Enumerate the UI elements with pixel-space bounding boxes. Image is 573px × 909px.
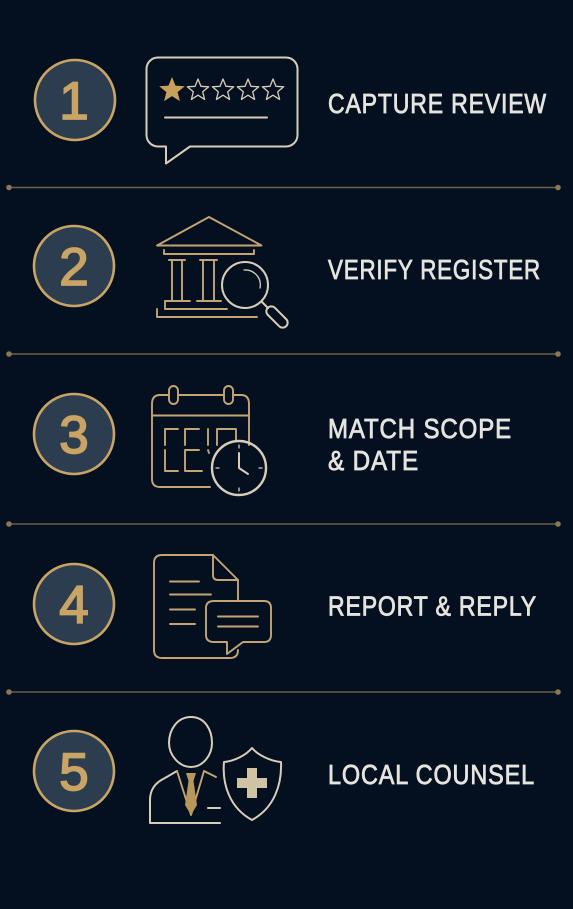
step 3 label: & DATE: [328, 445, 419, 476]
step 5 number badge: 5: [59, 743, 89, 802]
step 1 number badge: [35, 60, 115, 140]
icon: review speech bubble with one star: [146, 58, 298, 164]
step 4 number badge: 4: [59, 576, 89, 635]
icon: lawyer with medical shield: [150, 717, 281, 823]
step 3 number badge: [34, 394, 114, 474]
step 2 number badge: [34, 226, 114, 306]
step 2 number badge: 2: [59, 238, 89, 297]
icon: document with chat bubble: [154, 555, 271, 658]
step 4 number badge: [34, 564, 114, 644]
step 3 number badge: 3: [59, 406, 89, 465]
step 4 label: REPORT & REPLY: [328, 590, 537, 622]
step 3 label: MATCH SCOPE: [328, 413, 512, 444]
step 5 label: LOCAL COUNSEL: [328, 759, 535, 790]
step 5 number badge: [34, 731, 114, 811]
step 1 number badge: 1: [59, 72, 89, 131]
icon: courthouse with magnifying glass: [157, 217, 290, 330]
icon: calendar with clock: [152, 386, 266, 495]
